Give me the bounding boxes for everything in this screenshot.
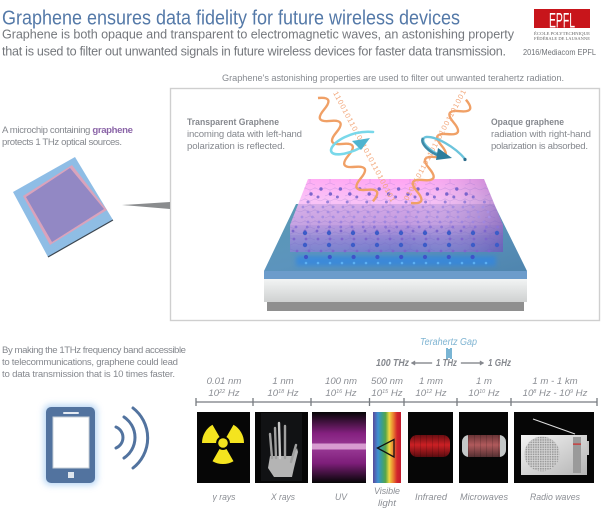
spectrum name labels: X rays (270, 492, 295, 503)
spectrum axis (196, 398, 597, 406)
wave: outgoing right (404, 96, 473, 207)
text: microchip caption: protects 1 THz optical sources. (2, 137, 122, 148)
spectrum name labels: Visible (374, 486, 400, 497)
text: opaque graphene: polarization is absorbed. (491, 141, 588, 152)
wavelength and frequency labels: 10 (468, 388, 479, 399)
wave: incoming left (311, 94, 380, 205)
wavelength and frequency labels: 10 (267, 388, 278, 399)
wavelength and frequency labels: Hz (432, 388, 447, 399)
spectrum name labels: light (378, 498, 396, 509)
radio tuner (573, 437, 581, 473)
spectrum name labels: UV (335, 492, 348, 503)
text: microchip caption: A microchip containing graphene (2, 125, 133, 136)
EPFL logo: ÉCOLE POLYTECHNIQUE (534, 31, 590, 36)
panel: radio waves (514, 412, 594, 483)
arrow: right-hand polarization (422, 137, 467, 161)
title: Graphene ensures data fidelity for future wireless devices (2, 6, 460, 30)
text: transparent graphene: polarization is reflected. (187, 141, 285, 152)
wavelength and frequency labels: 18 (278, 389, 285, 395)
frequency scale: 100 THz to 1 GHz: 100 THz (376, 358, 409, 369)
arrow: left-hand polarization (331, 132, 373, 154)
wavelength and frequency labels: 500 nm (371, 376, 403, 387)
wavelength and frequency labels: 100 nm (325, 376, 357, 387)
icon: radiation symbol (200, 423, 246, 464)
microchip photo (13, 157, 113, 257)
wavelength and frequency labels: Hz (284, 388, 299, 399)
spectrum name labels: Radio waves (530, 492, 580, 503)
subtitle text block: that is used to filter out unwanted signals in future wireless devices for faster data transmission. (2, 44, 506, 58)
EPFL logo: EPFL (549, 10, 575, 32)
text: microchip caption (2, 125, 133, 148)
blue glow under graphene (296, 256, 496, 266)
arrow: right (461, 361, 484, 365)
frequency scale: 100 THz to 1 GHz: 1 THz (436, 358, 457, 369)
text: opaque graphene: radiation with right-hand (491, 129, 591, 140)
wavelength and frequency labels: Hz - 10 (536, 388, 571, 399)
panel: UV (312, 412, 366, 483)
wavelength and frequency labels: 10 (415, 388, 426, 399)
wavelength and frequency labels: 10 (371, 388, 382, 399)
spectrum name labels: Infrared (415, 492, 448, 503)
text: opaque graphene: Opaque graphene (491, 117, 564, 128)
wavelength and frequency labels: 12 (426, 389, 432, 395)
text: transparent graphene: Transparent Graphene (187, 117, 279, 128)
wavelength and frequency labels: 0.01 nm (207, 376, 241, 387)
wavelength and frequency labels: 10 (523, 388, 533, 399)
panel: visible light (373, 412, 401, 483)
binary text: left wave: 1100101101011010110100101 (331, 90, 397, 203)
icon: smartphone (44, 405, 97, 485)
wavelength and frequency labels: 8 (533, 389, 537, 395)
text: telecom caption (2, 345, 186, 380)
wavelength and frequency labels: Hz (573, 388, 588, 399)
frequency scale: 100 THz to 1 GHz (376, 358, 511, 369)
radio speaker (524, 436, 560, 472)
wavelength and frequency labels: Hz (225, 388, 240, 399)
icon: signal waves (116, 408, 148, 468)
wavelength and frequency labels: 16 (336, 389, 343, 395)
wavelength and frequency labels: Hz (485, 388, 500, 399)
text: opaque graphene (491, 117, 591, 152)
wavelength and frequency labels: Hz (388, 388, 403, 399)
panel: microwaves (459, 412, 508, 483)
binary text: right wave: 0100101101101101001101001 (402, 88, 468, 202)
subtitle text block (2, 28, 515, 58)
wavelength and frequency labels: 9 (570, 389, 573, 395)
panel: graphene filter (170, 88, 600, 320)
terahertz gap label (420, 337, 477, 359)
panel: gamma rays (197, 412, 250, 483)
text: transparent graphene (187, 117, 302, 152)
pink graphene layers (290, 179, 503, 252)
wavelength and frequency labels: 1 m (476, 376, 492, 387)
panel: infrared (408, 412, 453, 483)
EPFL logo: FÉDÉRALE DE LAUSANNE (534, 36, 590, 41)
callout pointer (122, 202, 170, 209)
wavelength and frequency labels: 10 (208, 388, 219, 399)
wavelength and frequency labels: Hz (342, 388, 357, 399)
spectrum name labels: γ rays (212, 492, 236, 503)
wavelength and frequency labels: 1 m - 1 km (532, 376, 578, 387)
panel: X rays (255, 412, 308, 483)
terahertz gap label: Terahertz Gap (420, 337, 477, 348)
panel caption: Graphene's astonishing properties are used to filter out unwanted terahertz radiation. (222, 73, 564, 83)
icon: prism (378, 440, 394, 457)
text: transparent graphene: incoming data with left-hand (187, 129, 302, 140)
wavelength and frequency labels (207, 376, 588, 399)
arrow: left (411, 361, 432, 365)
text: telecom caption: to telecommunications, graphene could lead (2, 357, 178, 368)
wavelength and frequency labels: 22 (218, 389, 225, 395)
wavelength and frequency labels: 10 (479, 389, 486, 395)
wavelength and frequency labels: 15 (382, 389, 389, 395)
spectrum name labels (212, 486, 580, 509)
spectrum name labels: Microwaves (460, 492, 508, 503)
EPFL logo (534, 9, 590, 41)
substrate stack (264, 204, 527, 311)
hand x-ray (268, 423, 298, 477)
graphene atoms (293, 189, 500, 263)
text: telecom caption: By making the 1THz frequency band accessible (2, 345, 186, 356)
wavelength and frequency labels: 1 nm (272, 376, 294, 387)
text: telecom caption: to data transmission that is 10 times faster. (2, 369, 175, 380)
wavelength and frequency labels: 1 mm (419, 376, 443, 387)
frequency scale: 100 THz to 1 GHz: 1 GHz (488, 358, 511, 369)
subtitle text block: Graphene is both opaque and transparent to electromagnetic waves, an astonishing property (2, 28, 515, 42)
wavelength and frequency labels: 10 (325, 388, 336, 399)
